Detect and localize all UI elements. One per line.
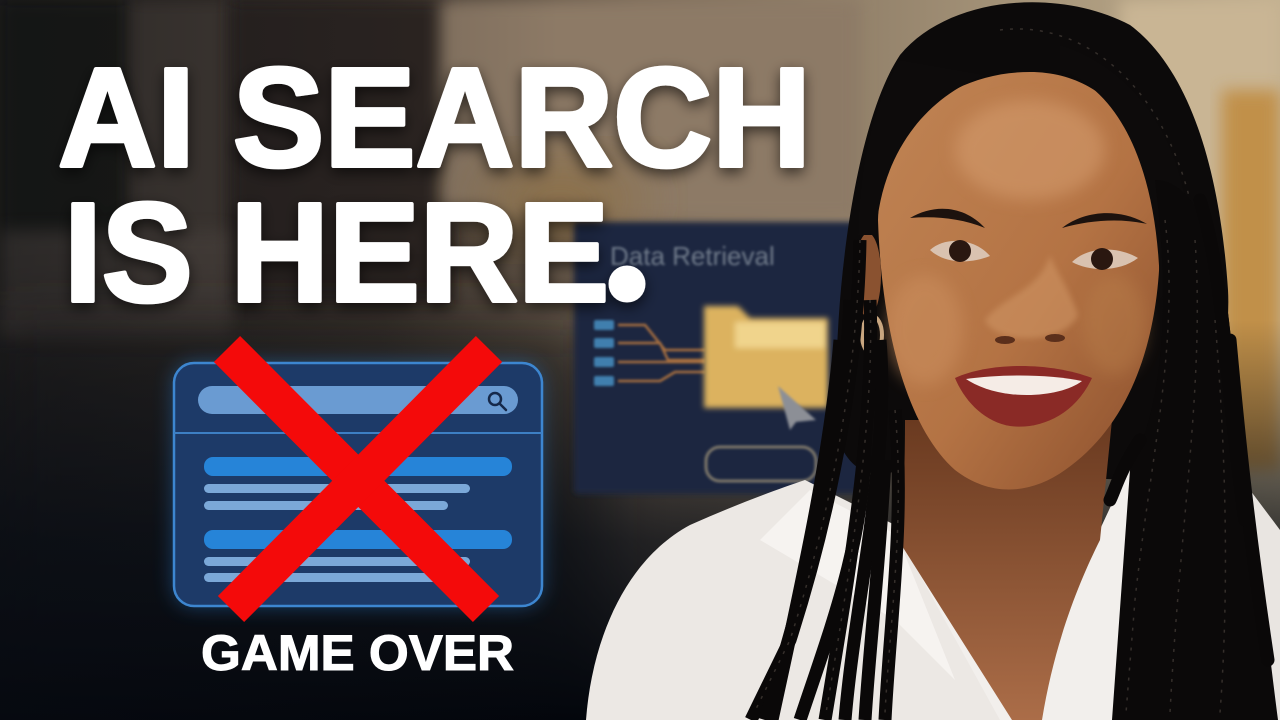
left eye <box>930 240 990 262</box>
right hair mass <box>1112 180 1278 720</box>
blurred monitor: data retrieval <box>574 222 864 494</box>
neck and chest <box>897 420 1112 720</box>
monitor cursor <box>778 386 816 430</box>
teeth <box>966 375 1082 395</box>
braids right edge <box>1110 200 1268 660</box>
braid texture highlights <box>754 29 1225 713</box>
search window glow <box>174 363 542 606</box>
shirt inner panel <box>895 465 1135 720</box>
monitor button <box>706 447 816 481</box>
search bar <box>198 386 518 414</box>
headline <box>58 38 811 331</box>
ear <box>855 233 881 317</box>
right eyebrow <box>1062 213 1147 228</box>
face <box>878 72 1160 490</box>
magnifier icon <box>489 393 506 410</box>
hairline right <box>1060 45 1190 300</box>
headline line 1: AI SEARCH <box>58 38 811 196</box>
monitor connector lines <box>618 325 705 381</box>
monitor node rows <box>594 320 614 386</box>
shirt right <box>1115 490 1280 720</box>
shirt left <box>586 480 1040 720</box>
game over label: GAME OVER <box>201 625 514 681</box>
hoop earring <box>862 316 882 354</box>
search results window icon <box>174 363 542 606</box>
right eye <box>1072 248 1138 270</box>
monitor title: Data Retrieval <box>610 241 775 271</box>
monitor folder icon <box>704 306 828 408</box>
rounded period: . <box>610 184 643 318</box>
result block 1 <box>204 457 512 510</box>
hairline left <box>858 60 985 235</box>
lips <box>955 366 1092 427</box>
left eyebrow <box>910 209 985 228</box>
face highlight <box>955 100 1105 200</box>
result block 2 <box>204 530 512 582</box>
search bar divider <box>174 432 542 434</box>
braids left <box>751 240 898 720</box>
hair crown <box>836 2 1228 480</box>
red X <box>227 349 489 609</box>
left collar <box>760 490 955 680</box>
headline line 2: IS HERE <box>64 173 609 331</box>
person portrait <box>586 2 1280 720</box>
nose <box>985 255 1078 338</box>
